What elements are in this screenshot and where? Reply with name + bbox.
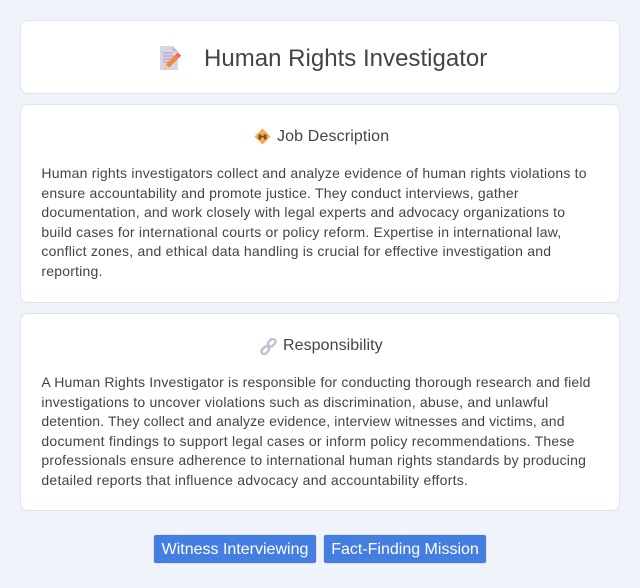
text block: responsibility: detailed reports that influence advocacy and accountability efforts. xyxy=(41,472,468,488)
text block: job description xyxy=(41,165,587,279)
text block: responsibility: investigations to uncover violations such as discrimination, abuse, and unlawful xyxy=(41,394,548,410)
panel: job description xyxy=(20,104,620,303)
text block: responsibility: document findings to support legal cases or inform policy recommendations. These xyxy=(41,433,575,449)
panel: title card xyxy=(20,20,620,94)
title: Human Rights Investigator xyxy=(204,45,487,72)
icon: document with pencil xyxy=(160,46,182,70)
text block: responsibility: professionals ensure adherence to international human rights standards by producing xyxy=(41,452,586,468)
tag: witness interviewing: Witness Interviewing xyxy=(162,541,308,558)
text block: job description: ensure accountability and promote justice. They conduct interviews, gather xyxy=(41,185,519,201)
text block: responsibility xyxy=(41,374,591,488)
heading: job description: Job Description xyxy=(277,128,389,145)
text block: job description: conflict zones, and ethical data handling is crucial for effective investigation and xyxy=(41,243,551,259)
tag: fact-finding mission: Fact-Finding Mission xyxy=(331,541,479,558)
text block: job description: documentation, and work closely with legal experts and advocacy organizations to xyxy=(41,204,565,220)
text block: job description: reporting. xyxy=(41,263,103,279)
icon: chain link xyxy=(260,338,277,355)
icon: puzzle diamond xyxy=(254,128,270,144)
text block: responsibility: A Human Rights Investigator is responsible for conducting thorough research and field xyxy=(41,374,591,390)
tag: witness interviewing xyxy=(153,534,317,564)
heading: responsibility: Responsibility xyxy=(283,337,383,354)
text block: responsibility: detention. They collect and analyze evidence, interview witnesses and victims, and xyxy=(41,413,565,429)
tag: fact-finding mission xyxy=(323,534,487,564)
panel: responsibility xyxy=(20,313,620,511)
text block: job description: build cases for international courts or policy reform. Expertise in international law, xyxy=(41,224,561,240)
text block: job description: Human rights investigators collect and analyze evidence of human rights violations to xyxy=(41,165,587,181)
